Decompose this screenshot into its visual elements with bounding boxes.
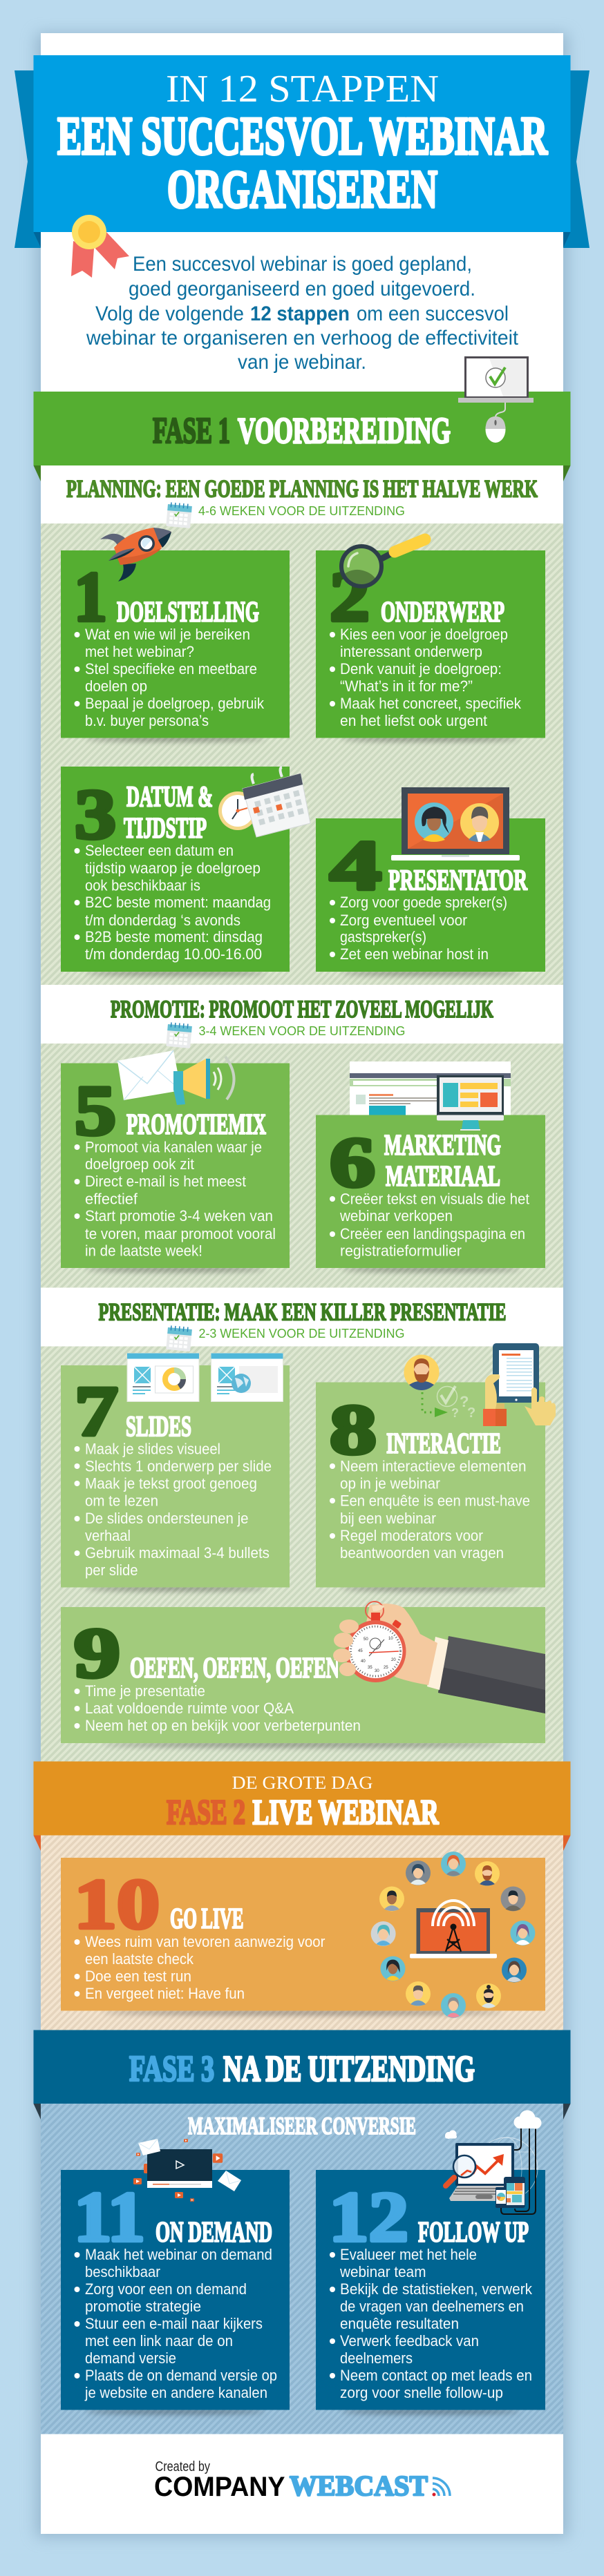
icon: interaction with man, tablet and hands: ? [467,1405,475,1421]
panel: step 7 slides: om te lezen [85,1492,158,1510]
panel: step 11 on demand: Plaats de on demand versie op [85,2367,277,2384]
panel: step 7 slides: Maak je tekst groot genoeg [85,1475,257,1492]
footer logo: WEBCAST [290,2470,428,2501]
icon: hand holding stopwatch: 50 [364,1637,368,1642]
fase 1 banner: FASE 1 [153,411,230,451]
icon: interaction with man, tablet and hands: ? [460,1393,469,1410]
panel: step 6 marketing materiaal: MATERIAAL [386,1161,500,1193]
header ribbon banner [15,55,589,248]
icon: calendar planning [166,502,192,528]
footer logo [154,2459,450,2502]
panel: step 8 interactie: beantwoorden van vragen [340,1544,504,1561]
fase 1 banner: VOORBEREIDING [238,411,451,451]
panel: step 11 on demand: je website en andere kanalen [84,2384,267,2401]
panel: step 7 slides: 7 [75,1372,118,1450]
intro text: goed georganiseerd en goed uitgevoerd. [129,278,475,300]
panel: presentatie background [41,1347,563,1761]
panel: step 10 go live: Doe een test run [85,1968,191,1985]
panel: step 5 promotiemix: 5 [75,1072,116,1151]
title [57,68,548,219]
icon: hand holding stopwatch: 25 [384,1666,388,1670]
panel: step 1 doelstelling [61,550,290,742]
icon: envelope and megaphone [117,1050,234,1105]
panel: step 9 oefenen: Laat voldoende ruimte voor Q&A [85,1700,294,1717]
icon: hand holding stopwatch: 30 [375,1669,379,1673]
panel: step 7 slides: Gebruik maximaal 3-4 bullets [85,1544,270,1561]
icon: hand holding stopwatch: 35 [368,1666,372,1670]
panel: step 4 presentator: Zet een webinar host in [340,945,489,963]
footer logo: Created by [155,2459,210,2474]
panel: step 1 doelstelling: 1 [74,558,107,637]
panel: step 11 on demand: demand versie [85,2349,176,2367]
title: ORGANISEREN [167,159,437,219]
panel: step 10 go live: 10 [74,1865,160,1943]
panel: step 12 follow up: de vragen van deelnemers en [340,2298,524,2315]
panel: step 3 datum en tijdstip: tijdstip waarop je doelgroep [85,859,261,877]
panel: step 11 on demand: ON DEMAND [155,2217,272,2249]
icon: video player with envelopes [133,2139,241,2202]
panel: step 1 doelstelling: DOELSTELLING [117,597,259,628]
icon: hand holding stopwatch: 20 [391,1658,396,1662]
panel: step 5 promotiemix: Start promotie 3-4 weken van [85,1207,273,1224]
panel: step 2 onderwerp: 2 [330,558,370,637]
panel: step 1 doelstelling: doelen op [85,677,147,695]
panel: step 10 go live [61,1858,545,2015]
icon: interaction with man, tablet and hands: ? [451,1406,459,1420]
panel: step 12 follow up: enquête resultaten [340,2315,459,2332]
heading: maximaliseer conversie: MAXIMALISEER CONVERSIE [188,2112,416,2140]
panel: step 12 follow up: zorg voor snelle follow-up [340,2384,503,2401]
panel: step 9 oefenen [61,1607,545,1747]
panel: step 8 interactie: 8 [330,1391,377,1470]
panel: step 7 slides: Slechts 1 onderwerp per slide [85,1457,272,1475]
panel: step 12 follow up: Neem contact op met leads en [340,2367,532,2384]
panel: step 2 onderwerp: Kies een voor je doelgroep [340,626,508,643]
panel: step 5 promotiemix: te voren, maar promoot vooral [85,1225,276,1242]
panel: step 3 datum en tijdstip: 3 [75,775,116,854]
panel: step 1 doelstelling: Wat en wie wil je bereiken [85,626,250,643]
icon: laptop with two presenters [391,787,520,861]
panel: promotie background [41,1044,563,1287]
panel: step 11 on demand [61,2170,290,2414]
icon: magnifying glass [341,539,425,587]
panel: step 3 datum en tijdstip: t/m donderdag 10.00-16.00 [85,945,262,963]
panel: step 6 marketing materiaal: registratieformulier [340,1242,462,1260]
panel: step 1 doelstelling: b.v. buyer persona’s [85,712,209,729]
icon: analytics laptop, devices and cloud [445,2111,542,2214]
panel: step 5 promotiemix: PROMOTIEMIX [126,1109,266,1141]
panel: step 2 onderwerp: Maak het concreet, specifiek [340,695,522,712]
panel: step 11 on demand: Maak het webinar on demand [85,2246,272,2263]
panel: step 7 slides: De slides ondersteunen je [85,1510,249,1527]
panel: step 12 follow up: FOLLOW UP [418,2217,529,2249]
icon: medal [71,215,129,278]
panel: step 11 on demand: 11 [74,2178,145,2257]
heading: promotie [111,995,493,1038]
panel: step 9 oefenen: Neem het op en bekijk voor verbeterpunten [85,1717,361,1734]
panel: step 5 promotiemix: Direct e-mail is het meest [85,1173,246,1190]
panel: step 4 presentator: PRESENTATOR [388,865,527,896]
panel: step 3 datum en tijdstip: Selecteer een datum en [85,842,234,859]
heading: planning [66,475,538,518]
panel: step 9 oefenen: Time je presentatie [85,1682,205,1700]
panel: step 5 promotiemix: effectief [85,1191,138,1207]
panel: step 12 follow up: webinar team [339,2263,426,2280]
fase 3 banner [33,2030,571,2120]
intro text [86,253,519,374]
panel: step 12 follow up: Evalueer met het hele [340,2246,477,2263]
panel: step 2 onderwerp [316,550,545,742]
icon: rocket [100,528,171,581]
panel: step 4 presentator: Zorg voor goede spreker(s) [340,894,507,911]
panel: step 3 datum en tijdstip: t/m donderdag ‘s avonds [85,912,240,929]
panel: step 6 marketing materiaal: Creëer een landingspagina en [340,1225,525,1242]
panel: step 4 presentator: 4 [330,826,381,905]
panel: step 6 marketing materiaal: Creëer tekst en visuals die het [340,1191,529,1207]
panel: step 5 promotiemix: Promoot via kanalen waar je [85,1138,262,1156]
panel: step 1 doelstelling: met het webinar? [85,643,194,660]
panel: step 5 promotiemix: in de laatste week! [85,1242,202,1260]
panel: step 5 promotiemix [61,1064,290,1272]
panel: step 8 interactie: INTERACTIE [386,1428,501,1460]
panel: step 1 doelstelling: Bepaal je doelgroep, gebruik [85,695,265,712]
fase 3 banner: FASE 3 [129,2049,214,2089]
panel: step 6 marketing materiaal: webinar verkopen [339,1207,453,1224]
panel: step 4 presentator [316,818,545,976]
title: IN 12 STAPPEN [166,68,439,110]
panel: step 2 onderwerp: interessant onderwerp [340,643,482,660]
panel: step 12 follow up: deelnemers [340,2349,413,2367]
fase 2 banner: DE GROTE DAG [232,1773,373,1793]
panel: step 3 datum en tijdstip: TIJDSTIP [124,813,207,845]
panel: step 7 slides: per slide [85,1561,138,1579]
heading: promotie: 3-4 WEKEN VOOR DE UITZENDING [199,1024,405,1038]
heading: planning: 4-6 WEKEN VOOR DE UITZENDING [198,504,405,518]
panel: planning background [41,523,563,985]
intro text: Volg de volgende [95,302,244,325]
panel: step 11 on demand: promotie strategie [85,2298,201,2315]
panel: step 7 slides [61,1365,290,1591]
panel: step 4 presentator: Zorg eventueel voor [340,912,467,929]
icon: live broadcast laptop [410,1901,497,1959]
heading: presentatie [98,1298,506,1340]
panel: step 12 follow up: 12 [329,2178,408,2257]
panel: step 8 interactie: op in je webinar [340,1475,440,1492]
panel: step 3 datum en tijdstip: B2B beste moment: dinsdag [85,928,263,945]
icon: hand holding stopwatch: 40 [361,1660,366,1664]
panel: step 4 presentator: gastspreker(s) [340,928,426,945]
icon: interaction with man, tablet and hands [404,1343,556,1426]
icon: hand holding stopwatch: 45 [358,1649,363,1653]
panel: step 5 promotiemix: doelgroep ook zit [85,1155,194,1173]
icon: laptop with check and mouse [458,356,534,443]
panel: step 12 follow up: Bekijk de statistieken, verwerk [340,2280,533,2298]
panel: step 10 go live: En vergeet niet: Have fun [85,1985,245,2002]
fase 2 banner: LIVE WEBINAR [253,1794,439,1832]
panel: step 10 go live: GO LIVE [170,1903,243,1935]
panel: step 6 marketing materiaal: MARKETING [384,1130,501,1162]
panel: step 7 slides: SLIDES [126,1412,191,1443]
panel: step 10 go live: een laatste check [85,1950,194,1968]
intro text: om een succesvol [357,302,509,325]
panel: step 1 doelstelling: Stel specifieke en meetbare [85,660,257,677]
icon: monitor with website [437,1075,504,1131]
panel: step 2 onderwerp: “What’s in it for me?” [340,677,473,695]
heading: presentatie: 2-3 WEKEN VOOR DE UITZENDING [199,1327,405,1340]
panel: step 7 slides: Maak je slides visueel [85,1441,220,1457]
panel: step 11 on demand: beschikbaar [85,2263,160,2280]
panel: step 3 datum en tijdstip: ook beschikbaar is [85,877,200,894]
icon: calendar promotie [166,1022,192,1048]
fase 3 banner: NA DE UITZENDING [223,2049,475,2089]
icon: clock and calendar [218,767,310,837]
panel: step 9 oefenen: 9 [74,1614,120,1693]
panel: step 8 interactie [316,1383,545,1591]
panel: step 6 marketing materiaal: 6 [330,1123,375,1202]
icon: ring of viewers [371,1852,535,2018]
panel: step 2 onderwerp: Denk vanuit je doelgroep: [340,660,502,677]
panel: step 10 go live: Wees ruim van tevoren aanwezig voor [85,1933,325,1950]
panel: step 11 on demand: met een link naar de on [85,2332,233,2349]
panel: step 8 interactie: Regel moderators voor [340,1527,483,1544]
intro text: 12 stappen [250,302,350,325]
fase 1 banner [33,392,571,481]
panel: step 12 follow up: Verwerk feedback van [340,2332,479,2349]
panel: step 7 slides: verhaal [85,1527,131,1544]
panel: step 12 follow up [316,2170,545,2414]
fase 2 banner [33,1761,571,1851]
panel: step 11 on demand: Zorg voor een on demand [85,2280,247,2298]
panel: step 2 onderwerp: ONDERWERP [381,597,504,628]
panel: step 2 onderwerp: en het liefst ook urgent [340,712,487,729]
fase 2 banner: FASE 2 [167,1794,245,1832]
panel: step 8 interactie: Een enquête is een must-have [340,1492,530,1510]
panel: live webinar background [41,1835,563,2030]
panel: step 6 marketing materiaal [316,1061,545,1272]
intro text: Een succesvol webinar is goed gepland, [133,253,472,276]
icon: calendar presentatie [166,1325,192,1352]
icon: two slides [127,1354,283,1402]
panel: step 9 oefenen: OEFEN, OEFEN, OEFEN [130,1653,339,1684]
icon: hand holding stopwatch: 10 [388,1637,393,1641]
panel: step 3 datum en tijdstip: B2C beste moment: maandag [85,894,271,911]
footer logo: COMPANY [154,2472,285,2502]
panel: step 3 datum en tijdstip [61,767,290,976]
icon: hand holding stopwatch [333,1602,545,1713]
panel: step 8 interactie: bij een webinar [340,1510,436,1527]
intro text: webinar te organiseren en verhoog de effectiviteit [86,327,519,349]
intro text: van je webinar. [238,351,366,374]
panel: step 8 interactie: Neem interactieve elementen [340,1457,527,1475]
panel: step 3 datum en tijdstip: DATUM & [126,782,213,814]
panel: na de uitzending background [41,2104,563,2434]
panel: step 11 on demand: Stuur een e-mail naar kijkers [85,2315,263,2332]
